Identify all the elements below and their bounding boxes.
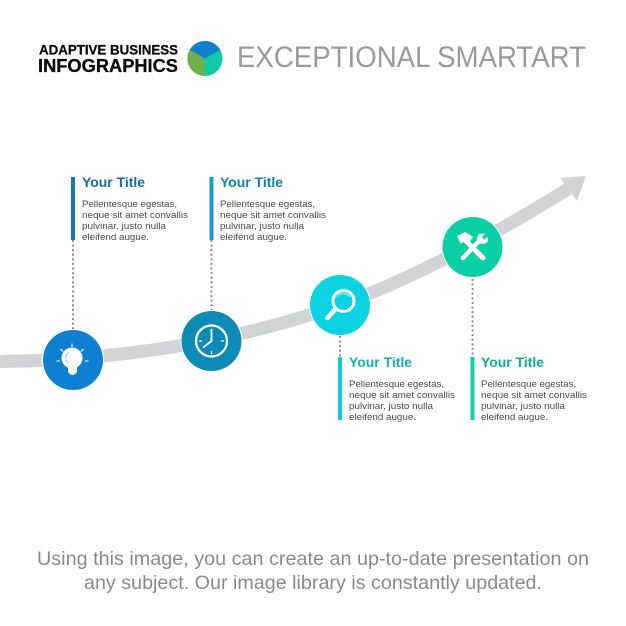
footer text bbox=[37, 548, 589, 594]
step text: eleifend augue. bbox=[349, 412, 416, 423]
step text: Pellentesque egestas, bbox=[481, 379, 576, 390]
step text: pulvinar, justo nulla bbox=[82, 221, 167, 232]
icon: light bulb bbox=[42, 329, 104, 391]
connector line bbox=[210, 240, 212, 310]
step text: Pellentesque egestas, bbox=[349, 379, 444, 390]
step title: Your Title bbox=[82, 175, 145, 190]
connector line bbox=[472, 279, 474, 357]
step text bbox=[481, 379, 587, 423]
step text: Pellentesque egestas, bbox=[82, 199, 177, 210]
step text: neque sit amet convallis bbox=[481, 390, 587, 401]
connector line bbox=[339, 336, 341, 357]
footer text: any subject. Our image library is constantly updated. bbox=[84, 572, 542, 594]
icon: tools bbox=[442, 216, 504, 278]
accent bar bbox=[210, 177, 214, 240]
step text: eleifend augue. bbox=[220, 232, 287, 243]
step title: Your Title bbox=[349, 355, 412, 370]
panel: step 3 bbox=[338, 336, 455, 423]
step title: Your Title bbox=[481, 355, 544, 370]
step text: Pellentesque egestas, bbox=[220, 199, 315, 210]
icon: clock bbox=[180, 310, 242, 372]
accent bar bbox=[71, 177, 75, 240]
step text bbox=[82, 199, 188, 243]
accent bar bbox=[338, 357, 342, 420]
step text bbox=[220, 199, 326, 243]
heading: EXCEPTIONAL SMARTART bbox=[237, 41, 586, 74]
growth arrow bbox=[0, 176, 586, 362]
step text: pulvinar, justo nulla bbox=[220, 221, 305, 232]
header logo text bbox=[38, 42, 178, 76]
header logo text: INFOGRAPHICS bbox=[38, 56, 178, 76]
step text: neque sit amet convallis bbox=[349, 390, 455, 401]
panel: step 4 bbox=[470, 279, 587, 423]
panel: step 1 bbox=[71, 175, 188, 329]
step text: neque sit amet convallis bbox=[220, 210, 326, 221]
accent bar bbox=[470, 357, 474, 420]
step text bbox=[349, 379, 455, 423]
step title: Your Title bbox=[220, 175, 283, 190]
step text: pulvinar, justo nulla bbox=[349, 401, 434, 412]
step text: pulvinar, justo nulla bbox=[481, 401, 566, 412]
step text: eleifend augue. bbox=[481, 412, 548, 423]
icon: logo pie bbox=[187, 41, 222, 76]
step text: eleifend augue. bbox=[82, 232, 149, 243]
footer text: Using this image, you can create an up-to-date presentation on bbox=[37, 548, 589, 570]
header logo text: ADAPTIVE BUSINESS bbox=[39, 42, 178, 58]
step text: neque sit amet convallis bbox=[82, 210, 188, 221]
connector line bbox=[72, 240, 74, 329]
icon: magnifier bbox=[309, 274, 371, 336]
panel: step 2 bbox=[210, 175, 326, 310]
